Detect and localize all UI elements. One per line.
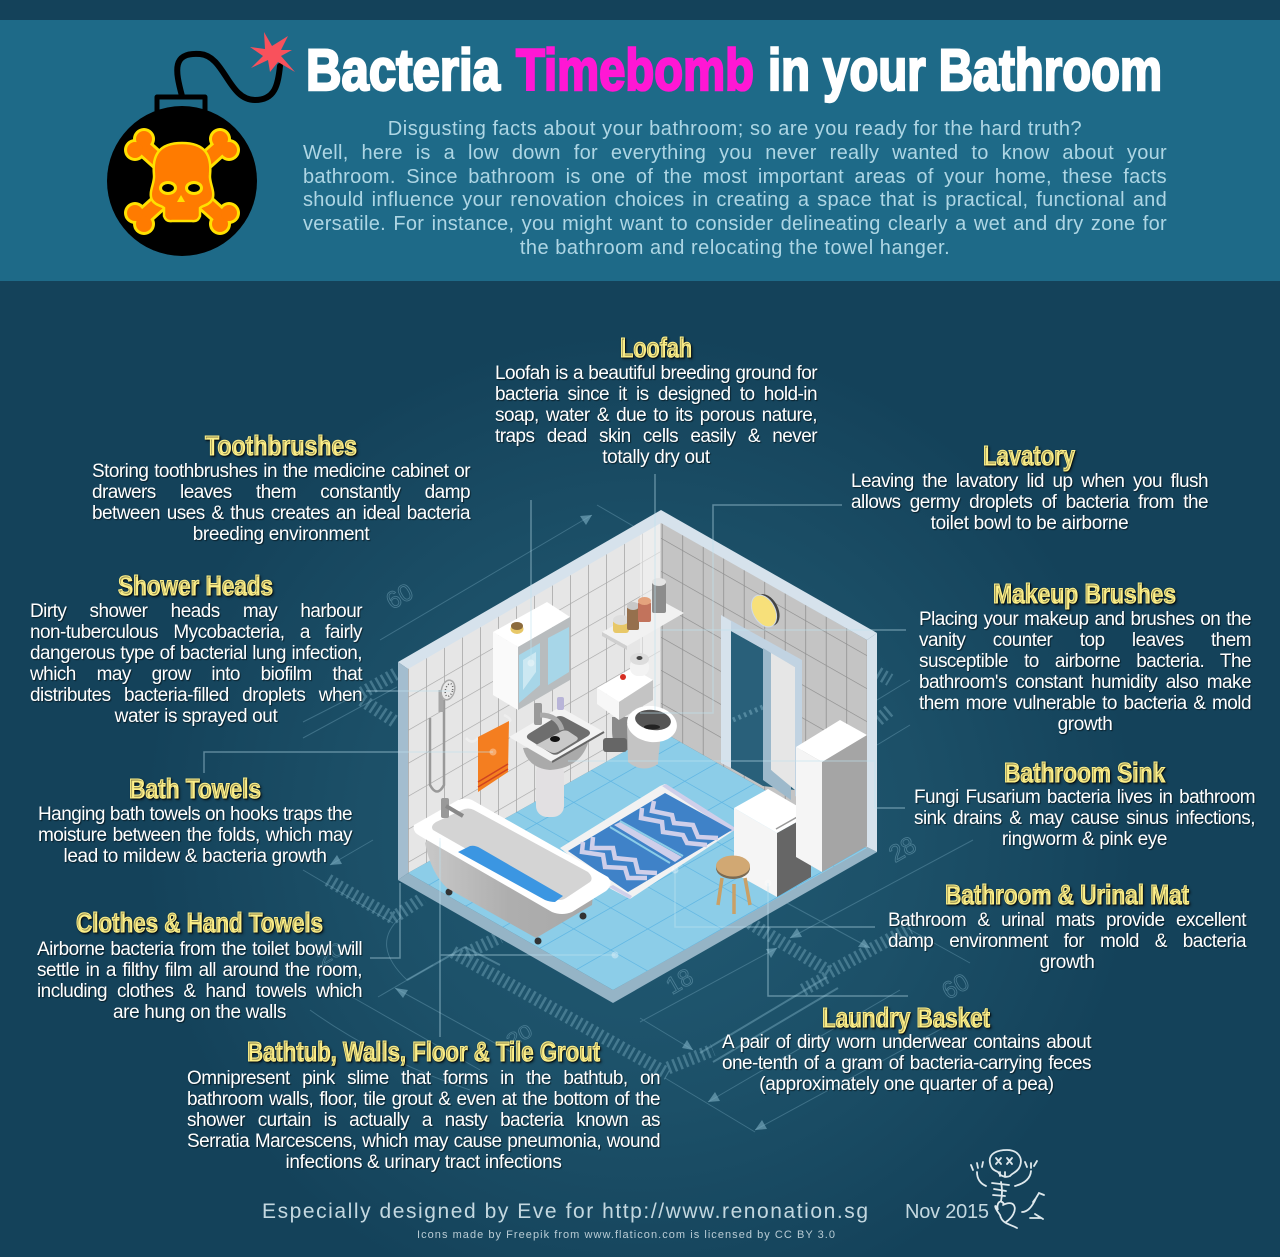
panel: Clothes and Hand Towels: settle in a filthy film all around the room, — [37, 960, 362, 981]
panel: Makeup Brushes: bathroom's constant humidity also make — [919, 672, 1251, 693]
panel: Bathtub, Walls, Floor and Tile Grout: Bathtub, Walls, Floor & Tile Grout — [247, 1036, 600, 1067]
panel: Shower Heads: which may grow into biofilm that — [30, 664, 362, 685]
panel: Toothbrushes: drawers leaves them constantly damp — [92, 482, 470, 503]
floor — [398, 731, 877, 1003]
blueprint dimension lines: 18 — [662, 963, 698, 1000]
panel: Bathroom Sink — [914, 757, 1256, 850]
panel: Loofah: totally dry out — [602, 447, 710, 468]
panel: Laundry Basket: (approximately one quarter of a pea) — [759, 1074, 1054, 1095]
panel: Lavatory: Lavatory — [983, 440, 1075, 471]
panel: Clothes and Hand Towels: are hung on the walls — [113, 1002, 286, 1023]
blueprint dimension lines: 60 — [382, 578, 418, 615]
panel: Clothes and Hand Towels — [37, 907, 363, 1024]
panel: Bathtub, Walls, Floor and Tile Grout: Omnipresent pink slime that forms in the bathtub, on — [187, 1068, 660, 1089]
bathtub — [414, 798, 611, 944]
toilet — [597, 653, 679, 769]
panel: Shower Heads — [30, 570, 364, 728]
panel: Bathroom Sink: ringworm & pink eye — [1002, 829, 1167, 850]
panel: Loofah — [495, 332, 818, 468]
cabinet — [493, 602, 570, 710]
callout leader lines — [204, 474, 908, 1037]
title: Bacteria — [306, 38, 501, 103]
panel: intro text — [303, 118, 1167, 259]
footer credit: Especially designed by Eve for http://www.renonation.sg — [262, 1200, 868, 1223]
towel — [466, 715, 510, 792]
wall: left — [398, 510, 661, 880]
laundry basket — [734, 789, 811, 897]
panel: Makeup Brushes: Makeup Brushes — [993, 578, 1176, 609]
panel: Shower Heads: Shower Heads — [118, 570, 273, 601]
panel: Clothes and Hand Towels: including clothes & hand towels which — [37, 981, 362, 1002]
panel: Lavatory: toilet bowl to be airborne — [931, 513, 1128, 534]
panel: Shower Heads: distributes bacteria-filled droplets when — [30, 685, 362, 706]
panel: Clothes and Hand Towels: Clothes & Hand Towels — [76, 907, 323, 938]
panel: Makeup Brushes: them more vulnerable to bacteria & mold — [919, 693, 1251, 714]
panel: Shower Heads: dangerous type of bacterial lung infection, — [30, 643, 362, 664]
rug — [560, 784, 737, 899]
panel: Bathroom and Urinal Mat: damp environment for mold & bacteria — [888, 931, 1246, 952]
panel: Bathtub, Walls, Floor and Tile Grout: Serratia Marcescens, which may cause pneumonia, wound — [187, 1131, 660, 1152]
bathroom illustration — [398, 510, 877, 1003]
panel: Makeup Brushes: susceptible to airborne bacteria. The — [919, 651, 1251, 672]
icon: bomb with skull — [107, 32, 295, 256]
panel: Toothbrushes: breeding environment — [193, 524, 369, 545]
panel: Lavatory — [851, 440, 1209, 534]
panel: Bathroom Sink: sink drains & may cause sinus infections, — [914, 808, 1255, 829]
wall: right — [661, 510, 877, 852]
panel: Laundry Basket — [722, 1002, 1093, 1096]
panel: Bathroom Sink: Bathroom Sink — [1004, 757, 1165, 788]
title — [306, 38, 1162, 103]
panel: Bathroom and Urinal Mat: Bathroom & Urinal Mat — [945, 879, 1189, 910]
blueprint dimension lines: 20 — [502, 1019, 536, 1052]
stool — [716, 856, 750, 914]
panel: Bath Towels: moisture between the folds, which may — [38, 825, 352, 846]
blueprint dimension lines: 28 — [884, 831, 921, 868]
panel: Laundry Basket: A pair of dirty worn underwear contains about — [722, 1032, 1091, 1053]
panel: Toothbrushes: Storing toothbrushes in the medicine cabinet or — [92, 461, 470, 482]
panel: intro text: should influence your renovation choices in creating a space that is practical, functional and — [303, 189, 1167, 211]
panel: Bath Towels — [38, 773, 354, 868]
panel: Bathtub, Walls, Floor and Tile Grout: bathroom walls, floor, tile grout & even at the bottom of the — [187, 1089, 660, 1110]
panel: Loofah: traps dead skin cells easily & never — [495, 426, 817, 447]
panel: Toothbrushes: Toothbrushes — [205, 430, 357, 461]
panel: Bathroom and Urinal Mat — [888, 879, 1248, 974]
title: Timebomb — [516, 38, 754, 103]
panel: Loofah: Loofah — [620, 332, 692, 363]
panel: Makeup Brushes — [919, 578, 1252, 736]
mirror — [746, 590, 785, 631]
panel: intro text: versatile. For instance, you might want to consider delineating clearly a wet and dry zone for — [303, 213, 1167, 235]
footer credit: Nov 2015 — [905, 1201, 989, 1223]
door — [721, 615, 802, 800]
panel: Toothbrushes — [92, 430, 472, 546]
panel: Lavatory: Leaving the lavatory lid up when you flush — [851, 471, 1208, 492]
panel: intro text: the bathroom and relocating the towel hanger. — [520, 237, 950, 259]
panel: Shower Heads: water is sprayed out — [115, 706, 277, 727]
panel: Laundry Basket: one-tenth of a gram of bacteria-carrying feces — [722, 1053, 1091, 1074]
tall cabinet — [796, 720, 867, 872]
panel: Bathtub, Walls, Floor and Tile Grout — [187, 1036, 662, 1174]
title: in your Bathroom — [768, 38, 1162, 103]
panel: Loofah: bacteria since it is designed to hold-in — [495, 384, 817, 405]
panel: Loofah: Loofah is a beautiful breeding ground for — [495, 363, 817, 384]
sink — [509, 697, 604, 817]
panel: Bathtub, Walls, Floor and Tile Grout: shower curtain is actually a nasty bacteria known as — [187, 1110, 660, 1131]
panel: Laundry Basket: Laundry Basket — [822, 1002, 990, 1033]
panel: intro text: Disgusting facts about your bathroom; so are you ready for the hard truth? — [388, 118, 1082, 140]
panel: Clothes and Hand Towels: Airborne bacteria from the toilet bowl will — [37, 939, 362, 960]
blueprint dimension lines: 60 — [938, 968, 974, 1005]
panel: Bath Towels: lead to mildew & bacteria growth — [63, 846, 327, 867]
panel: Shower Heads: Dirty shower heads may harbour — [30, 601, 362, 622]
panel: Loofah: soap, water & due to its porous nature, — [495, 405, 817, 426]
panel: Bathroom and Urinal Mat: growth — [1040, 952, 1094, 973]
shower head and hose — [430, 679, 457, 792]
panel: Shower Heads: non-tuberculous Mycobacteria, a fairly — [30, 622, 362, 643]
footer credit: Icons made by Freepik from www.flaticon.com is licensed by CC BY 3.0 — [417, 1229, 835, 1241]
panel: Lavatory: allows germy droplets of bacteria from the — [851, 492, 1208, 513]
panel: Bathtub, Walls, Floor and Tile Grout: infections & urinary tract infections — [285, 1152, 562, 1173]
panel: Bathroom and Urinal Mat: Bathroom & urinal mats provide excellent — [888, 910, 1246, 931]
header band — [0, 20, 1280, 281]
footer credit — [262, 1200, 989, 1241]
panel: Makeup Brushes: growth — [1058, 714, 1112, 735]
panel: Toothbrushes: between uses & thus creates an ideal bacteria — [92, 503, 470, 524]
panel: Makeup Brushes: Placing your makeup and brushes on the — [919, 609, 1251, 630]
panel: Bathroom Sink: Fungi Fusarium bacteria lives in bathroom — [914, 787, 1255, 808]
icon: skeleton doodle — [971, 1150, 1044, 1228]
panel: Makeup Brushes: vanity counter top leaves them — [919, 630, 1251, 651]
panel: Bath Towels: Hanging bath towels on hooks traps the — [38, 804, 352, 825]
panel: intro text: Well, here is a low down for everything you never really wanted to know about your — [303, 142, 1167, 164]
blueprint dimension lines — [303, 505, 974, 1132]
panel: intro text: bathroom. Since bathroom is one of the most important areas of your home, these facts — [303, 166, 1167, 188]
shelf with jars — [602, 578, 684, 650]
panel: Bath Towels: Bath Towels — [129, 773, 261, 804]
blueprint dimension lines: 20 — [313, 937, 347, 970]
